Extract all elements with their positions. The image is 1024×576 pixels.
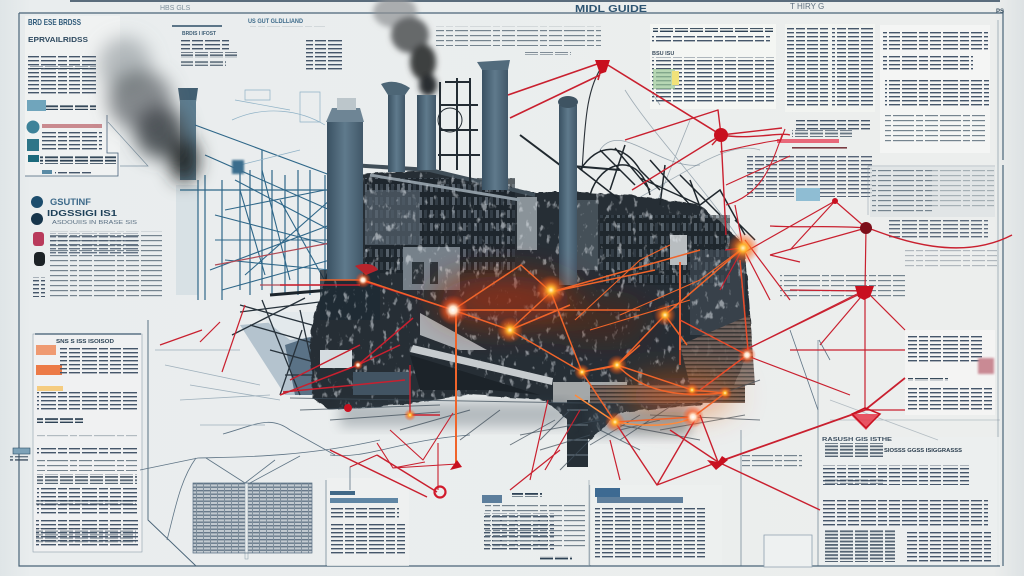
icon: teal circles [26, 120, 40, 134]
smoke plume top [373, 0, 437, 96]
scaffolding tower [438, 78, 480, 185]
red callout [794, 119, 870, 131]
teal highlight [27, 100, 46, 111]
header titles: T HIRY G [790, 2, 824, 11]
orange heat haze [435, 276, 735, 413]
panel: upper centre notes [172, 19, 601, 70]
panel: left middle notes: IDGSSIGI IS1 [47, 209, 118, 218]
text lines [60, 348, 140, 376]
text lines [28, 54, 96, 94]
header titles: HBS GLS [160, 5, 191, 12]
windows and facade [365, 178, 515, 273]
header titles: MIDL GUIDE [575, 4, 647, 15]
text block mid [742, 455, 802, 467]
panel: bottom centre text [482, 455, 812, 567]
data table [193, 483, 312, 559]
factory: sketched ground fade [155, 350, 760, 470]
panel: top right text columns: BSU ISU [652, 51, 674, 57]
text column left [482, 495, 502, 503]
small schematic [764, 535, 812, 567]
red network lines [160, 62, 1012, 510]
warning lines [42, 124, 102, 128]
panel: left middle notes: ASDOUIIS IN BRASE SIS [52, 220, 137, 226]
header titles: PS [996, 9, 1004, 15]
icon: red tag [33, 232, 44, 246]
orange highlights [36, 345, 56, 355]
panel: bottom right text [820, 437, 1000, 565]
margin tag [13, 448, 30, 454]
panel: top left notes [25, 16, 148, 176]
lower slope structure [420, 313, 487, 350]
node: glowing points [438, 295, 468, 325]
heading: BRD ESE BRDSS [28, 17, 81, 27]
smoke plume left [99, 37, 198, 182]
panel: left middle notes [31, 196, 162, 297]
stacks [326, 60, 578, 285]
grey connector lines [140, 65, 1000, 540]
orange network lines [320, 245, 748, 465]
panel: top right text columns [650, 24, 990, 153]
network nodes [344, 60, 880, 498]
icon: circular badge [31, 196, 43, 208]
column B [785, 24, 875, 112]
panel: bottom right text: RASUSH GIS ISTHE [822, 437, 893, 443]
column C [880, 25, 990, 153]
header titles [160, 2, 1004, 15]
icon: black bag [34, 252, 45, 266]
panel: bottom left report [10, 334, 142, 552]
panel: upper centre notes: US GUT GLDLLIAND [248, 19, 304, 25]
node: red junctions [344, 60, 880, 498]
panel: bottom text block [327, 478, 409, 566]
panel: right lower notes [905, 330, 995, 415]
tangled wires [575, 145, 755, 240]
factory: lower-left sketched roofs [232, 298, 335, 400]
panel: bottom right text: SIOSSS GGSS ISIGGRASSS [884, 448, 962, 454]
text lines [50, 231, 162, 297]
factory: sketched wireframe left [176, 88, 340, 300]
column A [650, 24, 776, 109]
panel: right middle text [747, 155, 997, 298]
panel: upper centre notes: BRDIS I IFOST [182, 31, 217, 37]
surface speckle [310, 172, 749, 432]
panel: top left notes: EPRVAILRIDSS [28, 37, 88, 44]
heading: GSUTINF [50, 197, 91, 208]
factory: main dark mass [300, 60, 760, 467]
panel: bottom left report: SNS S ISS ISOISOD [56, 339, 114, 345]
